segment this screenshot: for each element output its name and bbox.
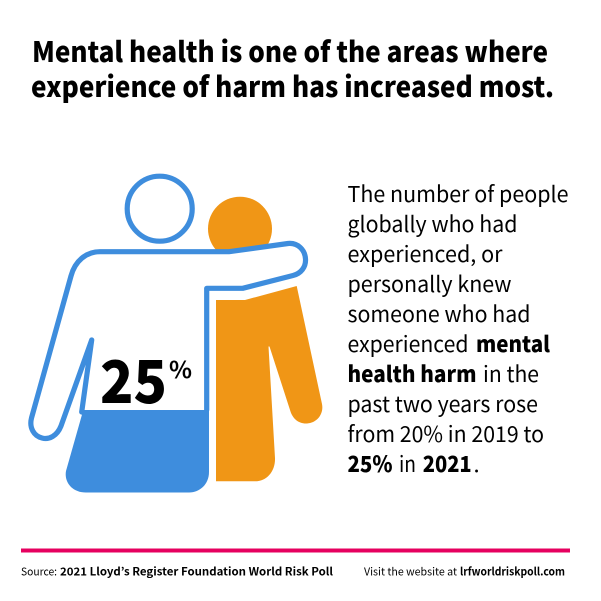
footer website	[364, 564, 565, 580]
body text: .	[474, 447, 480, 479]
body text: someone who had	[348, 297, 530, 329]
illustration: two people	[31, 176, 322, 492]
icon: blue person outline	[31, 243, 306, 438]
footer website: Visit the website at	[364, 564, 457, 580]
title: experience of harm has increased most.	[31, 66, 554, 106]
icon: orange person head	[208, 197, 272, 261]
body text	[348, 177, 568, 479]
icon: blue fill level	[66, 410, 209, 492]
body text: from 20% in 2019 to	[348, 417, 544, 449]
body text: in the	[483, 357, 539, 389]
footer rule	[21, 548, 570, 552]
body text: personally knew	[348, 267, 512, 299]
footer source: Source:	[21, 564, 57, 580]
footer website: lrfworldriskpoll.com	[460, 564, 565, 580]
body text: experienced, or	[348, 237, 503, 269]
footer source: 2021 Lloyd’s Register Foundation World Risk Poll	[60, 564, 334, 580]
body text: health harm	[348, 357, 476, 389]
icon: blue person head	[127, 176, 192, 241]
body text: globally who had	[348, 207, 518, 239]
title	[31, 31, 554, 106]
body text: in	[399, 447, 416, 479]
stat: 25 percent: %	[169, 351, 192, 385]
body text: past two years rose	[348, 387, 538, 419]
body text: experienced	[348, 327, 468, 359]
body text: 25%	[348, 447, 393, 479]
body text: The number of people	[348, 177, 568, 209]
title: Mental health is one of the areas where	[32, 31, 548, 71]
body text: 2021	[423, 447, 472, 479]
icon: orange person body	[216, 286, 322, 481]
stat: 25 percent: 25	[100, 335, 167, 420]
body text: mental	[476, 327, 551, 359]
